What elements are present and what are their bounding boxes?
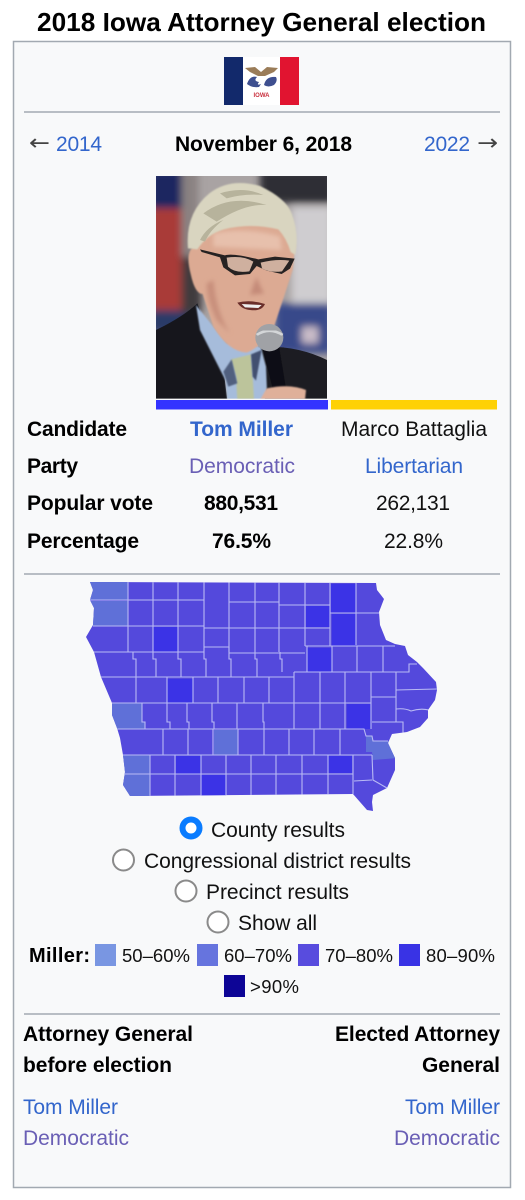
- radio: congressional district results: Congressional district results: [144, 850, 411, 873]
- radio: show all: Show all: [238, 912, 317, 935]
- hair: [188, 183, 297, 255]
- radio: precinct results: Precinct results: [206, 881, 349, 904]
- title: 2018 Iowa Attorney General election: [37, 7, 486, 37]
- before election column: Tom Miller: [23, 1096, 118, 1119]
- before election column: before election: [23, 1054, 172, 1077]
- legend: Miller vote share: Miller:: [29, 945, 90, 967]
- row: party: [27, 455, 463, 478]
- elected column: General: [422, 1054, 500, 1077]
- face: [188, 217, 295, 353]
- previous election link: [29, 131, 102, 156]
- glasses: [200, 249, 295, 275]
- row: percentage: Percentage: [27, 530, 139, 553]
- next election link: [424, 131, 498, 156]
- row: popular vote: [27, 492, 450, 515]
- row: percentage: 76.5%: [212, 530, 271, 553]
- elected column: Elected Attorney: [335, 1023, 500, 1046]
- mouth: [237, 301, 265, 310]
- flag lettering: IOWA: [254, 93, 270, 99]
- icon: Iowa flag: [224, 57, 299, 105]
- row: popular vote: Popular vote: [27, 492, 153, 515]
- legend: Miller vote share: 60–70%: [224, 945, 292, 966]
- next election link: →: [477, 131, 498, 156]
- row: party: Democratic: [189, 455, 295, 478]
- legend: Miller vote share: >90%: [250, 976, 299, 997]
- elected column: Democratic: [394, 1127, 500, 1150]
- row: percentage: 22.8%: [384, 530, 443, 553]
- previous election link: ←: [29, 131, 50, 156]
- party colour bar: Libertarian: [331, 400, 497, 410]
- map: Iowa county results: [86, 582, 437, 811]
- row: candidate: [27, 418, 487, 441]
- previous election link: 2014: [56, 133, 102, 156]
- before election column: Attorney General: [23, 1023, 193, 1046]
- legend: Miller vote share: 50–60%: [122, 945, 190, 966]
- party colour bar: Democratic: [156, 400, 328, 410]
- legend: Miller vote share: 70–80%: [325, 945, 393, 966]
- before election column: Democratic: [23, 1127, 129, 1150]
- row: candidate: Tom Miller: [190, 418, 293, 441]
- legend: Miller vote share: [29, 944, 495, 997]
- elected column: Tom Miller: [405, 1096, 500, 1119]
- row: percentage: [27, 530, 443, 553]
- row: party: Party: [27, 455, 78, 478]
- before election column: [23, 1023, 193, 1150]
- radio: county results (selected): County results: [211, 819, 345, 842]
- row: party: Libertarian: [365, 455, 463, 478]
- next election link: 2022: [424, 133, 470, 156]
- row: popular vote: 262,131: [376, 492, 450, 515]
- row: candidate: Candidate: [27, 418, 127, 441]
- election date: November 6, 2018: [175, 133, 352, 156]
- legend: Miller vote share: 80–90%: [426, 945, 495, 966]
- county boundaries: [90, 582, 437, 797]
- elected column: [335, 1023, 500, 1150]
- counties 60-70%: [85, 578, 398, 798]
- microphone: [262, 348, 286, 387]
- row: candidate: Marco Battaglia: [341, 418, 487, 441]
- row: popular vote: 880,531: [204, 492, 278, 515]
- results table: [27, 418, 487, 553]
- counties 80-90%: [153, 584, 371, 797]
- photo: Tom Miller: [150, 170, 333, 400]
